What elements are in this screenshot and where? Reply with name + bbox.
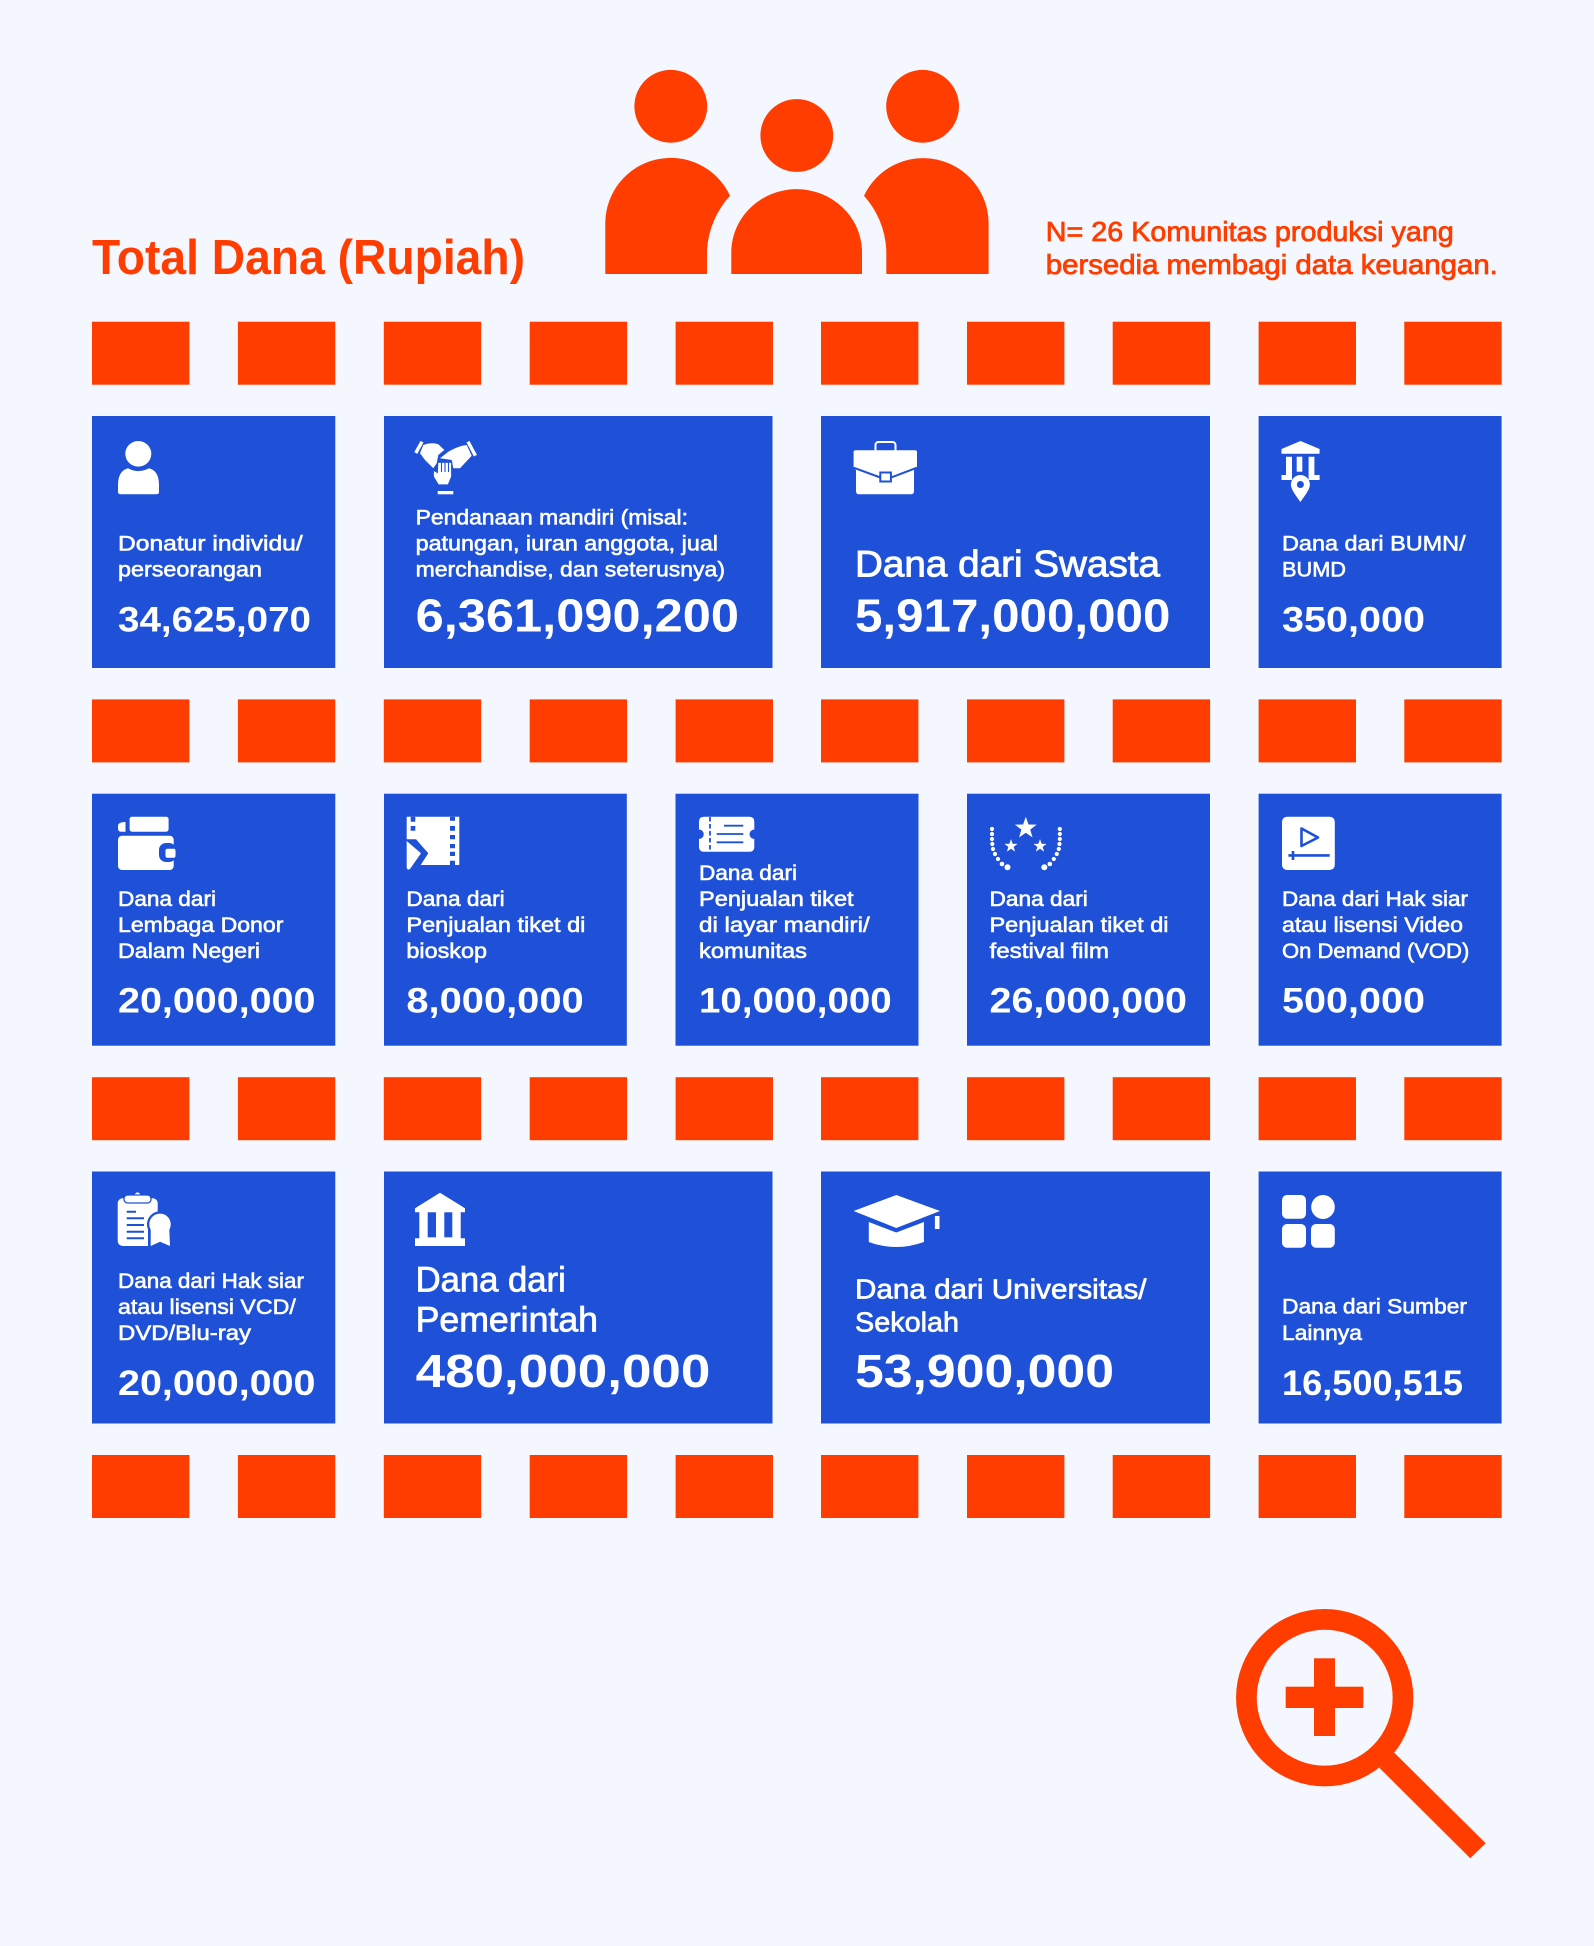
label: Dalam Negeri bbox=[118, 940, 260, 963]
panel: penjualan tiket layar mandiri bbox=[676, 794, 918, 1046]
label: Pendanaan mandiri (misal: bbox=[416, 507, 688, 530]
panel: dana dari BUMN/BUMD bbox=[1259, 416, 1502, 668]
icon: ticket bbox=[699, 817, 754, 852]
label: atau lisensi Video bbox=[1282, 914, 1463, 937]
label bbox=[406, 888, 585, 963]
value: 6,361,090,200 bbox=[416, 590, 739, 642]
value: 500,000 bbox=[1282, 982, 1425, 1021]
label: Dana dari Swasta bbox=[855, 544, 1160, 585]
value: 20,000,000 bbox=[118, 1364, 316, 1403]
value: 10,000,000 bbox=[699, 982, 892, 1021]
panel: penjualan tiket festival bbox=[967, 794, 1210, 1046]
sample size note bbox=[1046, 216, 1498, 280]
tile strip 1 bbox=[92, 322, 1502, 385]
value: 53,900,000 bbox=[855, 1345, 1114, 1397]
label: Dana dari bbox=[416, 1261, 566, 1300]
panel: video on demand bbox=[1259, 794, 1502, 1046]
icon: joined hands bbox=[416, 442, 475, 494]
value: 480,000,000 bbox=[416, 1345, 710, 1397]
label bbox=[990, 888, 1168, 963]
panel: pendanaan mandiri bbox=[384, 416, 772, 668]
value: 5,917,000,000 bbox=[855, 590, 1170, 642]
label: atau lisensi VCD/ bbox=[118, 1296, 296, 1319]
label: Dana dari Hak siar bbox=[1282, 888, 1468, 911]
label: Dana dari Hak siar bbox=[118, 1270, 304, 1293]
icon: app grid bbox=[1282, 1195, 1335, 1248]
tile strip 3 bbox=[92, 1077, 1502, 1140]
label: Donatur individu/ bbox=[118, 533, 303, 556]
icon: magnifying glass with plus bbox=[1246, 1619, 1486, 1858]
icon: clipboard with badge bbox=[118, 1192, 173, 1246]
label: Dana dari bbox=[118, 888, 216, 911]
label: Penjualan tiket bbox=[699, 888, 854, 911]
sample size note: bersedia membagi data keuangan. bbox=[1046, 249, 1498, 280]
label: bioskop bbox=[406, 940, 487, 963]
value: 26,000,000 bbox=[990, 982, 1187, 1021]
panel: VCD DVD Blu-ray bbox=[92, 1172, 335, 1424]
sample size note: N= 26 Komunitas produksi yang bbox=[1046, 216, 1454, 247]
value: 8,000,000 bbox=[406, 982, 584, 1021]
icon: building with pin bbox=[1282, 441, 1320, 502]
panel: dana dari pemerintah bbox=[384, 1172, 772, 1424]
icon: wallet bbox=[118, 817, 176, 870]
label: Dana dari Universitas/ bbox=[855, 1274, 1147, 1305]
value: 34,625,070 bbox=[118, 601, 311, 640]
icon: briefcase bbox=[854, 442, 917, 494]
label: komunitas bbox=[699, 940, 807, 963]
label: perseorangan bbox=[118, 559, 262, 582]
icon: film bbox=[407, 817, 459, 870]
tile strip 2 bbox=[92, 699, 1502, 762]
icon: stars and laurel bbox=[990, 817, 1062, 870]
icon: three people bbox=[605, 70, 989, 274]
label: merchandise, dan seterusnya) bbox=[416, 559, 725, 582]
label: festival film bbox=[990, 940, 1109, 963]
label: Lembaga Donor bbox=[118, 914, 283, 937]
value: 20,000,000 bbox=[118, 982, 316, 1021]
label bbox=[699, 862, 870, 963]
panel: lembaga donor bbox=[92, 794, 335, 1046]
panel: donatur individu bbox=[92, 416, 335, 668]
panel: dana dari swasta bbox=[821, 416, 1210, 668]
value: 350,000 bbox=[1282, 601, 1425, 640]
icon: graduation cap bbox=[854, 1195, 940, 1247]
label bbox=[416, 1261, 598, 1340]
label bbox=[118, 1270, 304, 1345]
icon: video player bbox=[1282, 817, 1335, 870]
label bbox=[118, 888, 283, 963]
label: Penjualan tiket di bbox=[406, 914, 585, 937]
label bbox=[1282, 888, 1469, 963]
label: Penjualan tiket di bbox=[990, 914, 1168, 937]
label: DVD/Blu-ray bbox=[118, 1322, 252, 1345]
tile strip 4 bbox=[92, 1455, 1502, 1518]
label: Dana dari Sumber bbox=[1282, 1296, 1467, 1319]
label bbox=[1282, 1296, 1467, 1345]
label: BUMD bbox=[1282, 559, 1346, 582]
panel: penjualan tiket bioskop bbox=[384, 794, 627, 1046]
label: Pemerintah bbox=[416, 1301, 598, 1340]
panel: universitas sekolah bbox=[821, 1172, 1210, 1424]
label: patungan, iuran anggota, jual bbox=[416, 533, 718, 556]
icon: person bbox=[118, 441, 159, 494]
label: Sekolah bbox=[855, 1307, 959, 1338]
value: 16,500,515 bbox=[1282, 1364, 1463, 1403]
label: Lainnya bbox=[1282, 1322, 1362, 1345]
panel: sumber lainnya bbox=[1259, 1172, 1502, 1424]
title: Total Dana (Rupiah) bbox=[92, 231, 525, 285]
label: On Demand (VOD) bbox=[1282, 940, 1469, 963]
label: Dana dari bbox=[406, 888, 505, 911]
label bbox=[118, 533, 303, 582]
label bbox=[1282, 533, 1466, 582]
label: Dana dari BUMN/ bbox=[1282, 533, 1466, 556]
label bbox=[416, 507, 725, 582]
label: di layar mandiri/ bbox=[699, 914, 870, 937]
icon: government building bbox=[415, 1193, 465, 1246]
label bbox=[855, 1274, 1147, 1338]
label: Dana dari bbox=[990, 888, 1088, 911]
label: Dana dari bbox=[699, 862, 797, 885]
